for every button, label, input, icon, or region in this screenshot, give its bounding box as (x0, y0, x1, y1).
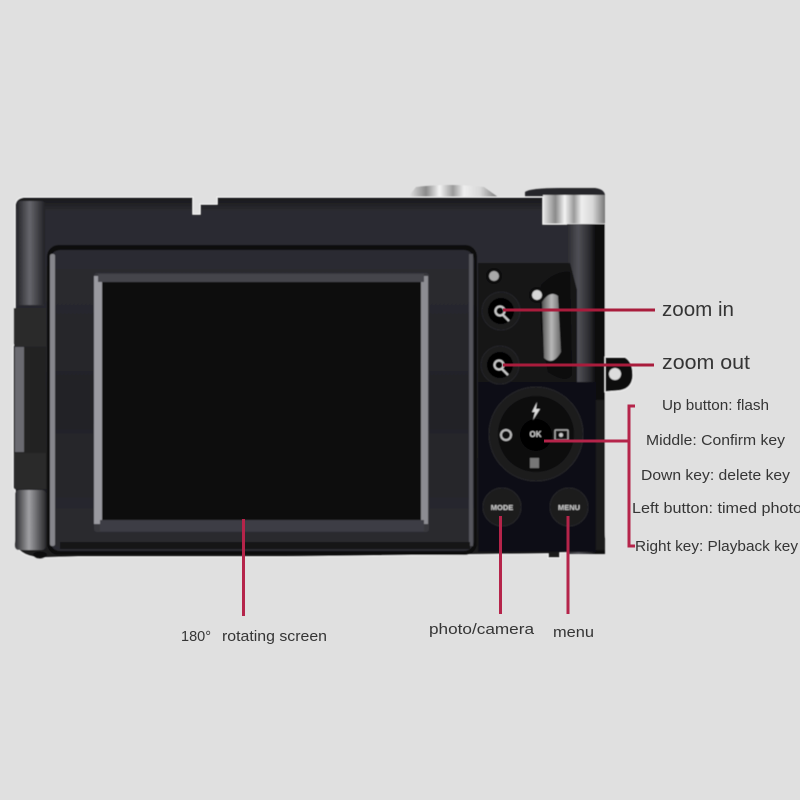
callout line: zoom out (503, 364, 654, 366)
callout bracket: directional keys (544, 406, 635, 546)
playback button (529, 287, 545, 303)
label: middle: Middle: Confirm key (646, 433, 786, 449)
icon: timer (501, 430, 511, 440)
camera illustration (13, 185, 633, 558)
label: rotating screen: rotating screen (222, 629, 327, 645)
directional pad (489, 387, 583, 481)
label: photo/camera: photo/camera (429, 622, 535, 638)
mode button: MODE (491, 503, 513, 512)
top zoom dial (408, 185, 498, 197)
directional pad: OK (530, 430, 542, 439)
label: down key: Down key: delete key (641, 468, 791, 484)
callout line: photo/camera (499, 516, 502, 614)
strap lug (605, 357, 633, 392)
left hinge column (14, 201, 47, 558)
screen display (102, 282, 421, 520)
label: zoom out: zoom out (662, 352, 750, 374)
thumb rest (540, 272, 572, 379)
label: rotating screen: 180° (181, 629, 211, 645)
callout line: menu (566, 516, 570, 614)
label: menu: menu (553, 625, 594, 641)
right grip column (567, 224, 605, 554)
rotating screen panel (47, 245, 477, 555)
label: rotating screen (181, 629, 327, 645)
menu button (550, 488, 588, 526)
icon: delete (530, 458, 539, 468)
label: up button: Up button: flash (662, 398, 769, 414)
zoom out button (481, 346, 519, 384)
callout line: rotating screen (242, 519, 245, 616)
mode dial (525, 188, 605, 224)
label: right key: Right key: Playback key (635, 539, 799, 555)
icon: flash (532, 402, 540, 420)
label: zoom in: zoom in (662, 299, 734, 321)
zoom in button (482, 292, 520, 330)
indicator light (486, 268, 502, 284)
control panel (478, 263, 577, 552)
menu button: MENU (558, 503, 580, 512)
camera body (13, 197, 605, 558)
icon: playback (555, 430, 568, 440)
screen bezel (94, 273, 429, 532)
mode button (483, 488, 521, 526)
label: left button: Left button: timed photo (632, 501, 800, 517)
callout line: zoom in (503, 308, 655, 312)
